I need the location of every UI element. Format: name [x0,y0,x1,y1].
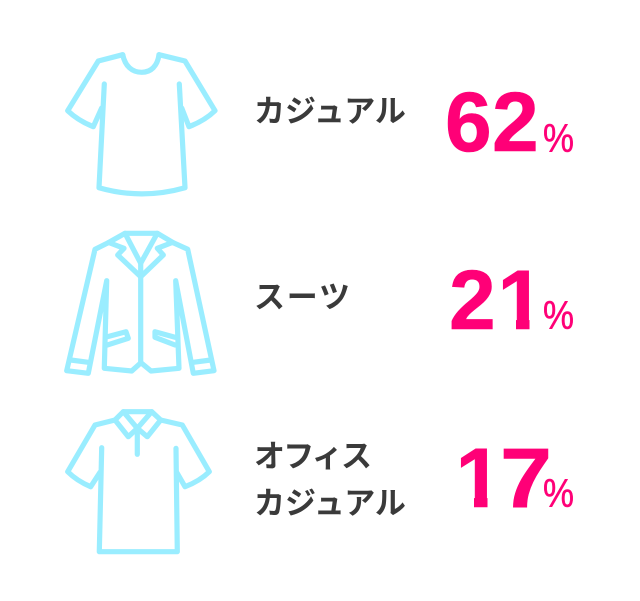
value: 21 percent: 1 [498,253,544,347]
value: 17 percent: 7 [500,431,552,525]
label: office casual: カジュアル [254,486,406,521]
label: suit: スーツ [254,280,350,315]
icon: t-shirt [68,55,215,194]
value: 21 percent: % [543,294,574,338]
value: 62 percent [445,75,574,169]
label: casual: カジュアル [254,94,406,129]
value: 17 percent [455,431,574,525]
icon: polo shirt [68,412,209,552]
value: 62 percent: % [543,117,574,161]
value: 62 percent: 2 [492,75,539,169]
value: 21 percent [449,253,574,347]
value: 62 percent: 6 [445,75,492,169]
value: 21 percent: 2 [449,253,496,347]
value: 17 percent: % [543,472,574,516]
label: office casual: オフィス [254,439,372,474]
label: office casual [254,439,406,521]
icon: suit jacket [67,233,214,373]
value: 17 percent: 1 [456,431,502,525]
